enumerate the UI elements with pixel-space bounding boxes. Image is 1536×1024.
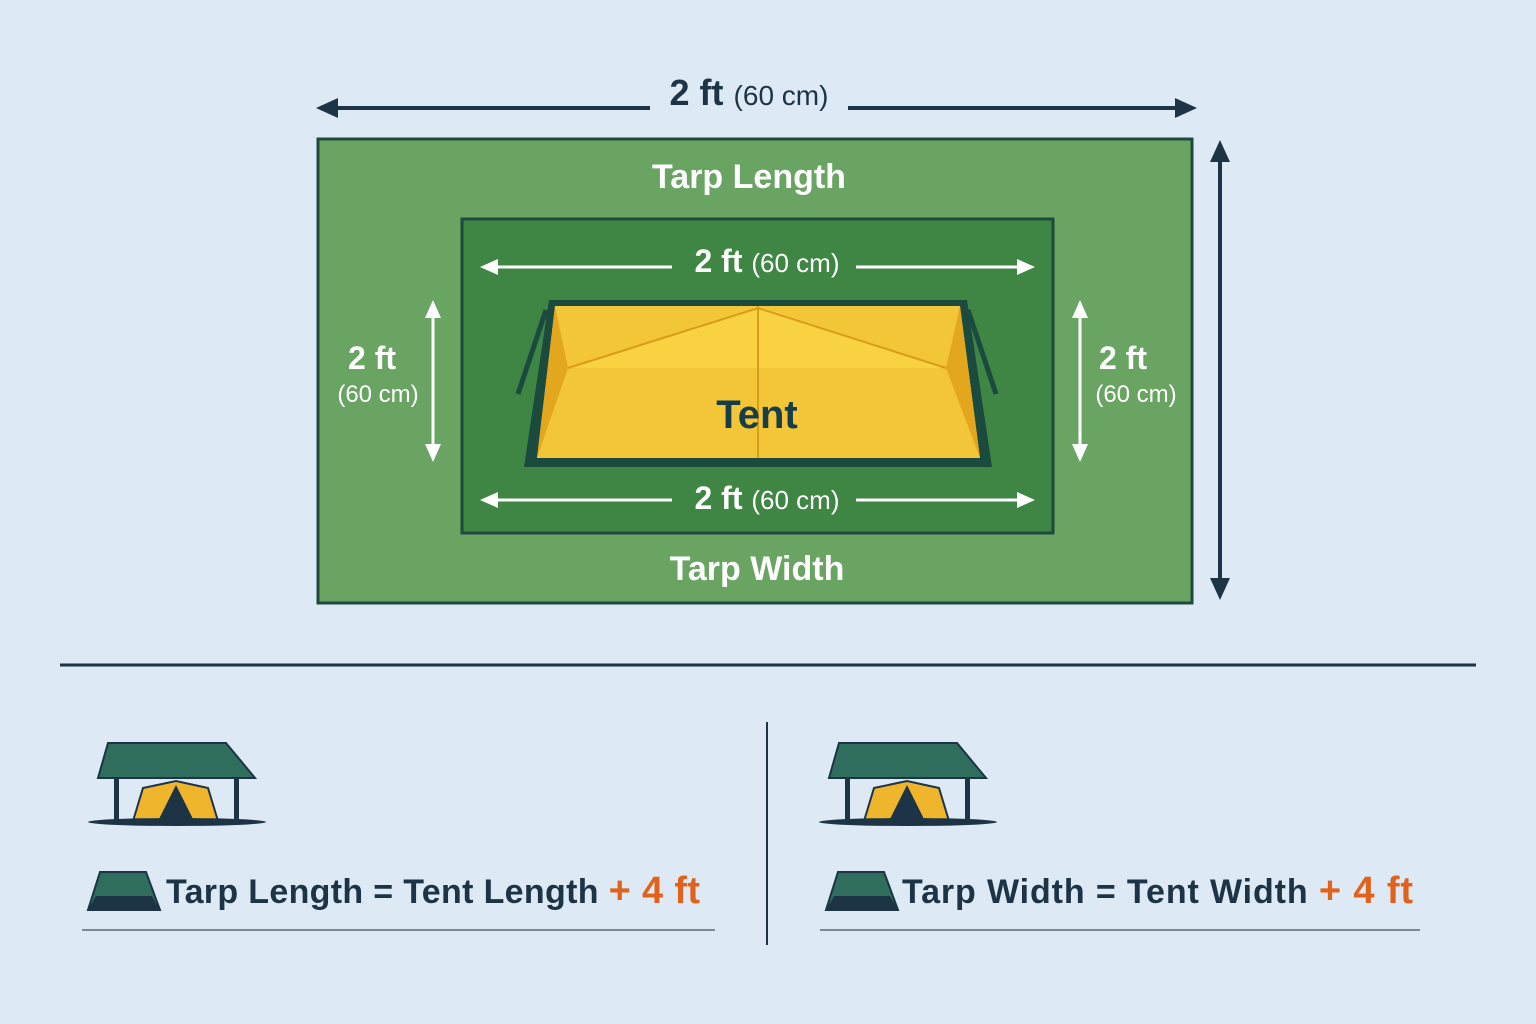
heading: tarp length: Tarp Length xyxy=(652,158,846,196)
heading: tarp width: Tarp Width xyxy=(670,550,844,588)
left dimension: 2 ft xyxy=(348,340,396,376)
left dimension xyxy=(337,300,441,462)
icon: small tent xyxy=(826,872,898,910)
right dimension: 2 ft xyxy=(1099,340,1147,376)
top inner dimension: 2 ft (60 cm) xyxy=(694,243,840,279)
right vertical arrow xyxy=(1210,140,1230,600)
top dimension arrow xyxy=(316,72,1197,118)
icon: shelter right xyxy=(819,743,997,826)
formula: tarp length xyxy=(82,870,715,930)
left dimension: (60 cm) xyxy=(337,381,419,408)
top inner dimension xyxy=(480,243,1035,279)
formula: tarp width xyxy=(820,870,1420,930)
formula: tarp length: Tarp Length = Tent Length + 4 ft xyxy=(166,870,700,912)
panel: outer tarp xyxy=(318,139,1192,603)
bottom inner dimension xyxy=(480,480,1035,516)
bottom inner dimension: 2 ft (60 cm) xyxy=(694,480,840,516)
tent xyxy=(518,300,996,467)
top dimension arrow: 2 ft (60 cm) xyxy=(670,72,828,113)
formula: tarp width: Tarp Width = Tent Width + 4 ft xyxy=(902,870,1413,912)
right dimension xyxy=(1072,300,1177,462)
right dimension: (60 cm) xyxy=(1095,381,1177,408)
panel: inner footprint xyxy=(462,219,1053,533)
tent: Tent xyxy=(716,393,798,437)
icon: shelter left xyxy=(88,743,266,826)
icon: small tent xyxy=(88,872,160,910)
